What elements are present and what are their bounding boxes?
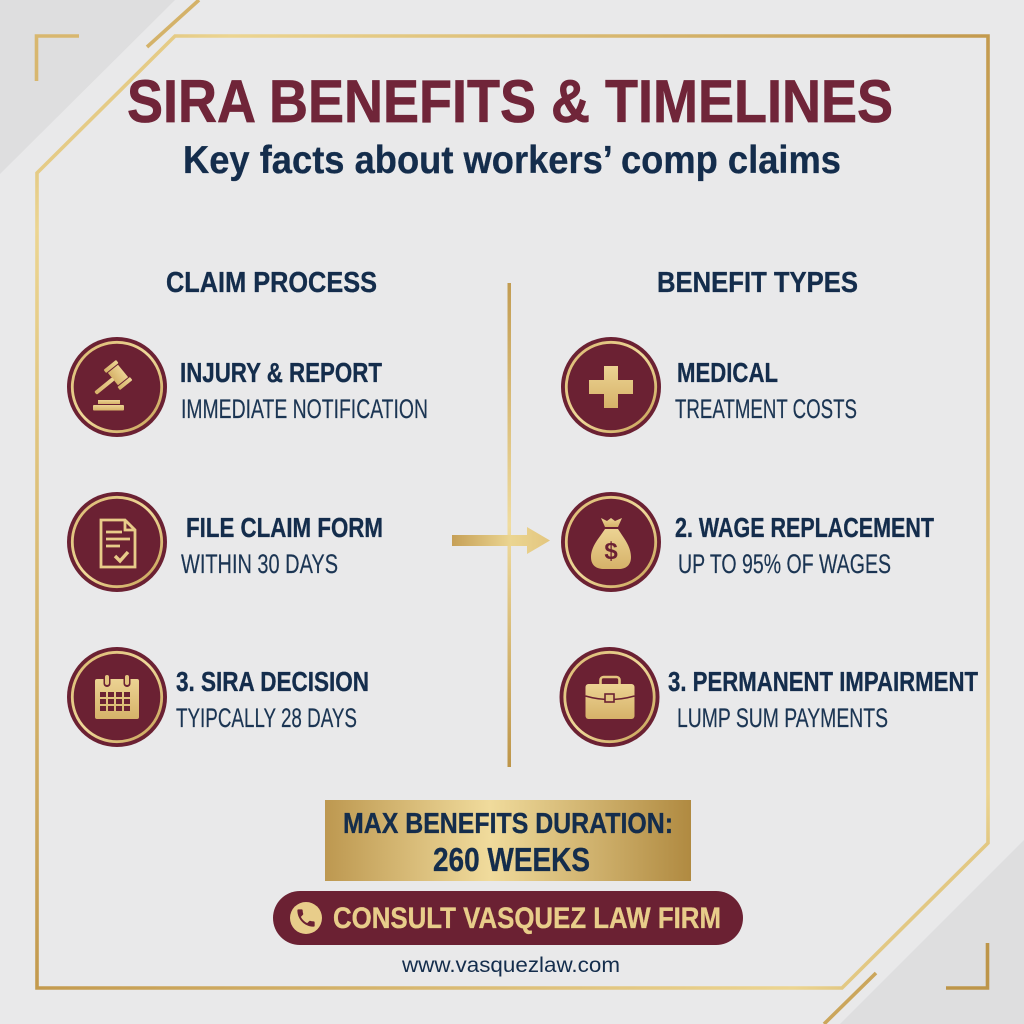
corner tick: top	[147, 0, 199, 47]
detail: treatment costs: TREATMENT COSTS	[675, 394, 857, 424]
decorative corner panel: top left	[0, 0, 175, 174]
detail: immediate notification: IMMEDIATE NOTIFICATION	[181, 394, 428, 424]
heading: claim process: CLAIM PROCESS	[166, 267, 377, 299]
label: sira decision: 3. SIRA DECISION	[176, 666, 369, 697]
button label: CONSULT VASQUEZ LAW FIRM	[333, 902, 721, 935]
icon: phone	[290, 902, 322, 934]
icon: money bag: $	[604, 538, 618, 565]
item: injury and report	[67, 337, 428, 437]
icon: medical cross	[561, 337, 661, 437]
corner bracket: top left	[36, 36, 79, 81]
detail: lump sum payments: LUMP SUM PAYMENTS	[677, 703, 888, 733]
item: wage replacement	[561, 492, 934, 592]
icon: document	[67, 492, 167, 592]
corner tick: bottom	[824, 973, 876, 1024]
call to action button	[273, 891, 743, 945]
label: file claim form: FILE CLAIM FORM	[186, 512, 383, 543]
label: wage replacement: 2. WAGE REPLACEMENT	[675, 512, 934, 543]
detail: within 30 days: WITHIN 30 DAYS	[181, 549, 338, 579]
icon: money bag	[561, 492, 661, 592]
label: injury and report: INJURY & REPORT	[180, 357, 382, 388]
item: medical	[561, 337, 857, 437]
center divider	[508, 283, 511, 767]
callout line one: MAX BENEFITS DURATION:	[343, 808, 673, 840]
callout: max benefits duration	[325, 800, 691, 881]
item: sira decision	[67, 647, 369, 747]
icon: calendar	[67, 647, 167, 747]
callout line two: 260 WEEKS	[433, 841, 590, 878]
icon: gavel	[67, 337, 167, 437]
item: permanent impairment	[560, 647, 978, 747]
website url: www.vasquezlaw.com	[401, 954, 620, 977]
title: SIRA BENEFITS & TIMELINES	[127, 68, 893, 135]
decorative corner panel: bottom right	[840, 840, 1024, 1024]
item: file claim form	[67, 492, 383, 592]
arrow: process to benefits	[452, 527, 550, 554]
detail: typically 28 days: TYIPCALLY 28 DAYS	[176, 703, 357, 733]
corner bracket: bottom right	[946, 943, 988, 988]
detail: up to 95 percent of wages: UP TO 95% OF WAGES	[678, 549, 891, 579]
icon: briefcase	[560, 647, 660, 747]
subtitle: Key facts about workers’ comp claims	[183, 139, 841, 182]
heading: benefit types: BENEFIT TYPES	[657, 267, 858, 299]
label: medical: MEDICAL	[677, 357, 778, 388]
